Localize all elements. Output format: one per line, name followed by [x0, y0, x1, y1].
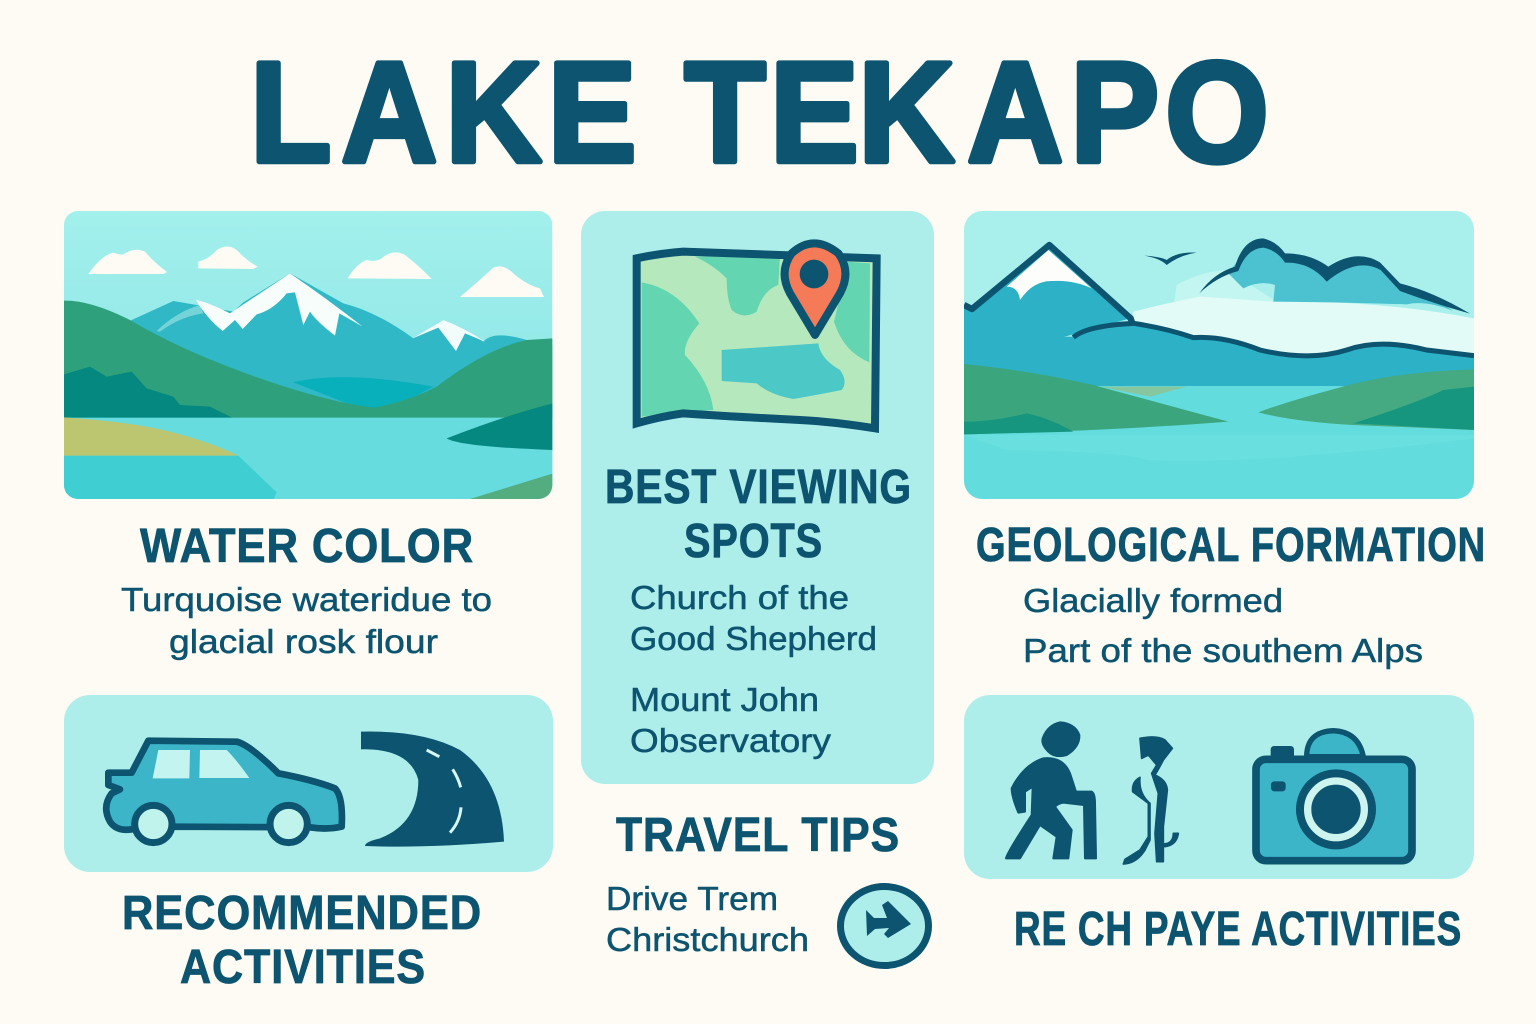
icon: map with pin	[637, 243, 877, 428]
heading: travel tips: TRAVEL TIPS	[616, 809, 900, 862]
heading: water color: WATER COLOR	[140, 520, 474, 573]
pale wedge	[1174, 270, 1274, 302]
heading: best viewing spots: SPOTS	[684, 515, 823, 568]
text: viewing spots list: Church of the	[630, 579, 849, 616]
text: viewing spots list	[630, 579, 877, 759]
pin	[785, 243, 845, 335]
text: viewing spots list: Good Shepherd	[630, 620, 877, 657]
title: LAKE TEKAPO	[250, 33, 1269, 193]
panel: geological formation illustration	[964, 211, 1476, 501]
text: viewing spots list: Observatory	[630, 722, 832, 759]
lake	[964, 386, 1476, 501]
mountain	[964, 249, 1127, 338]
heading: recommended activities: ACTIVITIES	[180, 941, 426, 994]
green hills	[64, 301, 553, 420]
heading: best viewing spots	[605, 461, 912, 568]
text: travel tips: Drive Trem	[606, 880, 778, 917]
clouds	[88, 247, 544, 297]
text: travel tips	[606, 880, 809, 958]
ridge	[966, 326, 1474, 386]
text: water color description: Turquoise wateridue to	[121, 581, 492, 618]
icon: camera	[1256, 731, 1412, 861]
text: viewing spots list: Mount John	[630, 681, 819, 718]
text: travel tips: Christchurch	[606, 921, 809, 958]
heading: recommended activities: RECOMMENDED	[122, 887, 482, 940]
bird	[1144, 253, 1197, 265]
white cloud band	[1133, 296, 1474, 354]
cloud bank	[1228, 247, 1453, 311]
text: geological description: Part of the southem Alps	[1023, 632, 1423, 669]
icon: road	[361, 732, 504, 847]
heading: recommended activities	[122, 887, 482, 994]
text: geological description	[1023, 582, 1423, 669]
panel: car and road	[64, 695, 553, 872]
panel: best viewing spots	[581, 211, 934, 784]
distant mountains	[131, 274, 552, 418]
snow caps	[196, 273, 363, 336]
text: geological description: Glacially formed	[1023, 582, 1283, 619]
lake	[64, 418, 554, 501]
text: water color description: glacial rosk flour	[169, 623, 438, 660]
icon: car	[106, 741, 342, 843]
outlines	[964, 245, 1132, 322]
icon: plane in circle	[840, 886, 928, 966]
panel: hiking and camera	[964, 695, 1474, 879]
panel: water color illustration	[64, 211, 554, 501]
green shores	[964, 364, 1228, 434]
icon: hiker	[1006, 722, 1096, 858]
icon: walking figure fragment	[1123, 737, 1178, 864]
text: water color description	[121, 581, 492, 660]
heading: best viewing spots: BEST VIEWING	[605, 461, 912, 514]
